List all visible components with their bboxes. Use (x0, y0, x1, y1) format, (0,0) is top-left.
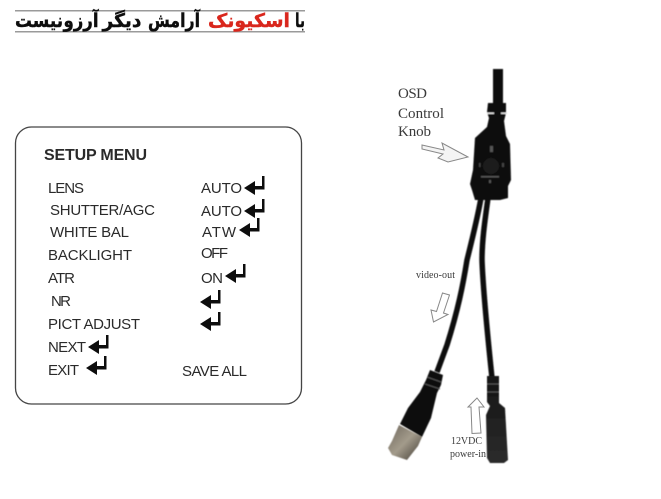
label: 12VDC power-in: 12VDC (451, 436, 482, 447)
left cable (437, 198, 481, 372)
menu item labels: NEXT (48, 339, 86, 356)
title banner: با (295, 10, 305, 32)
label: 12VDC power-in: power-in (450, 449, 486, 460)
title banner (15, 8, 305, 32)
menu item labels: BACKLIGHT (48, 247, 132, 264)
title banner: اسکیونک (208, 10, 290, 32)
label: OSD control knob: Control (398, 106, 444, 122)
menu item values: ATW (202, 224, 237, 241)
title banner: آرزو (63, 8, 99, 32)
label: OSD control knob (398, 86, 444, 140)
title banner: آرامش (148, 8, 200, 32)
menu item labels: SHUTTER/AGC (50, 202, 155, 219)
top cable (493, 69, 503, 105)
arrow: video-out (431, 293, 450, 322)
menu item values: ON (201, 270, 223, 287)
label: video-out: video-out (416, 270, 455, 281)
menu item labels: NR (51, 293, 71, 310)
icons: enter arrows (86, 176, 264, 375)
title banner: دیگر (102, 9, 142, 32)
arrow: power-in (468, 398, 484, 434)
label: OSD control knob: Knob (398, 124, 431, 140)
panel: setup menu (16, 127, 302, 404)
title banner: نیست (15, 10, 63, 32)
menu item values (182, 180, 247, 380)
menu item values: SAVE ALL (182, 363, 247, 380)
menu item labels: WHITE BAL (50, 224, 129, 241)
knob (483, 158, 499, 174)
menu item values: AUTO (201, 203, 242, 220)
power jack (486, 376, 508, 463)
right cable (482, 198, 492, 378)
BNC connector (400, 370, 443, 437)
label: OSD control knob: OSD (398, 86, 427, 102)
menu item labels: LENS (48, 180, 84, 197)
menu item labels: EXIT (48, 362, 79, 379)
photo: Y-cable with OSD control knob (388, 69, 511, 463)
heading: setup menu: SETUP MENU (44, 147, 147, 164)
menu item labels (48, 180, 155, 379)
control body (470, 103, 511, 200)
menu item labels: ATR (48, 270, 75, 287)
menu item labels: PICT ADJUST (48, 316, 140, 333)
label: 12VDC power-in (450, 436, 486, 460)
arrow: to OSD knob (422, 143, 468, 162)
menu item values: AUTO (201, 180, 242, 197)
menu item values: OFF (201, 245, 228, 262)
